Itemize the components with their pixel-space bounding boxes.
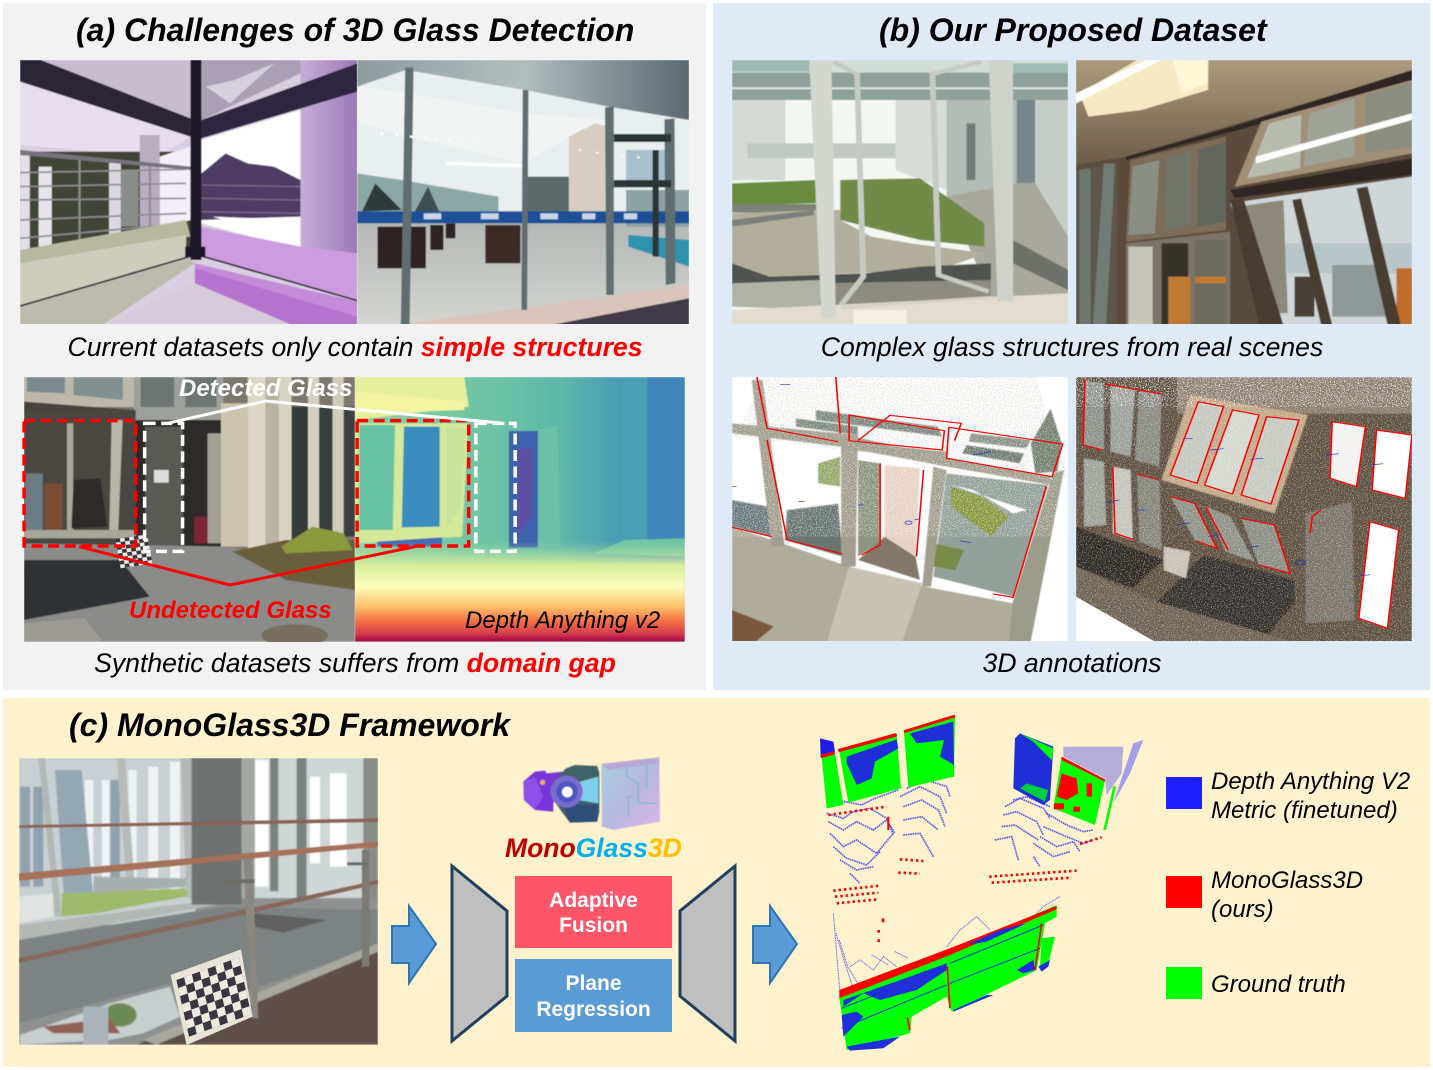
label: depth anything v2: Depth Anything v2 — [465, 607, 660, 634]
module: plane regression: Plane — [565, 972, 622, 995]
photo: input railing — [19, 758, 378, 1045]
heading (a): (a) Challenges of 3D Glass Detection — [76, 12, 634, 48]
photo: purple glass corner — [20, 60, 357, 325]
caption: complex glass: Complex glass structures from real scenes — [821, 332, 1323, 362]
arrow: output — [753, 906, 797, 983]
logo wordmark: MonoGlass3D — [505, 833, 682, 863]
panel: proposed dataset — [713, 3, 1430, 690]
legend — [1166, 768, 1410, 999]
module: adaptive fusion — [515, 876, 672, 948]
annotation: detected and undetected glass — [24, 401, 515, 585]
label: detected glass: Detected Glass — [179, 375, 352, 402]
module: plane regression — [515, 959, 672, 1032]
photo: open glass doors — [732, 60, 1068, 325]
point cloud: angled facade with 3D annotations — [1076, 377, 1412, 642]
depth map — [355, 377, 685, 642]
panel: challenges — [3, 3, 706, 690]
caption: 3D annotations: 3D annotations — [983, 648, 1161, 678]
photo: glass storefront — [357, 60, 689, 325]
module: plane regression: Regression — [536, 998, 651, 1021]
legend: depth anything — [1166, 768, 1410, 824]
photo: building entrance — [24, 377, 355, 647]
legend: ground truth — [1166, 967, 1346, 999]
heading (b): (b) Our Proposed Dataset — [879, 12, 1268, 48]
heading (c): (c) MonoGlass3D Framework — [69, 707, 512, 743]
encoder trapezoid — [452, 866, 507, 1041]
legend: monoglass3d — [1166, 867, 1363, 923]
legend: ground truth: Ground truth — [1211, 971, 1346, 998]
photo: angled glass facade — [1076, 60, 1412, 325]
module: adaptive fusion: Adaptive — [549, 889, 638, 912]
output: 3D point cloud comparison — [820, 716, 1143, 1051]
icon: camera and glass logo — [523, 757, 660, 830]
point cloud: glass doors with 3D annotations — [732, 377, 1068, 642]
legend: depth anything: Metric (finetuned) — [1211, 797, 1398, 824]
label: undetected glass: Undetected Glass — [129, 597, 332, 624]
module: adaptive fusion: Fusion — [559, 914, 628, 937]
legend: monoglass3d: MonoGlass3D — [1211, 867, 1363, 894]
legend: monoglass3d: (ours) — [1211, 896, 1274, 923]
legend: depth anything: Depth Anything V2 — [1211, 768, 1410, 795]
caption: simple structures: Current datasets only contain simple structures — [67, 332, 643, 362]
panel: framework — [3, 698, 1430, 1067]
arrow: input — [392, 906, 436, 983]
decoder trapezoid — [680, 866, 735, 1041]
caption: domain gap: Synthetic datasets suffers from domain gap — [94, 648, 616, 678]
